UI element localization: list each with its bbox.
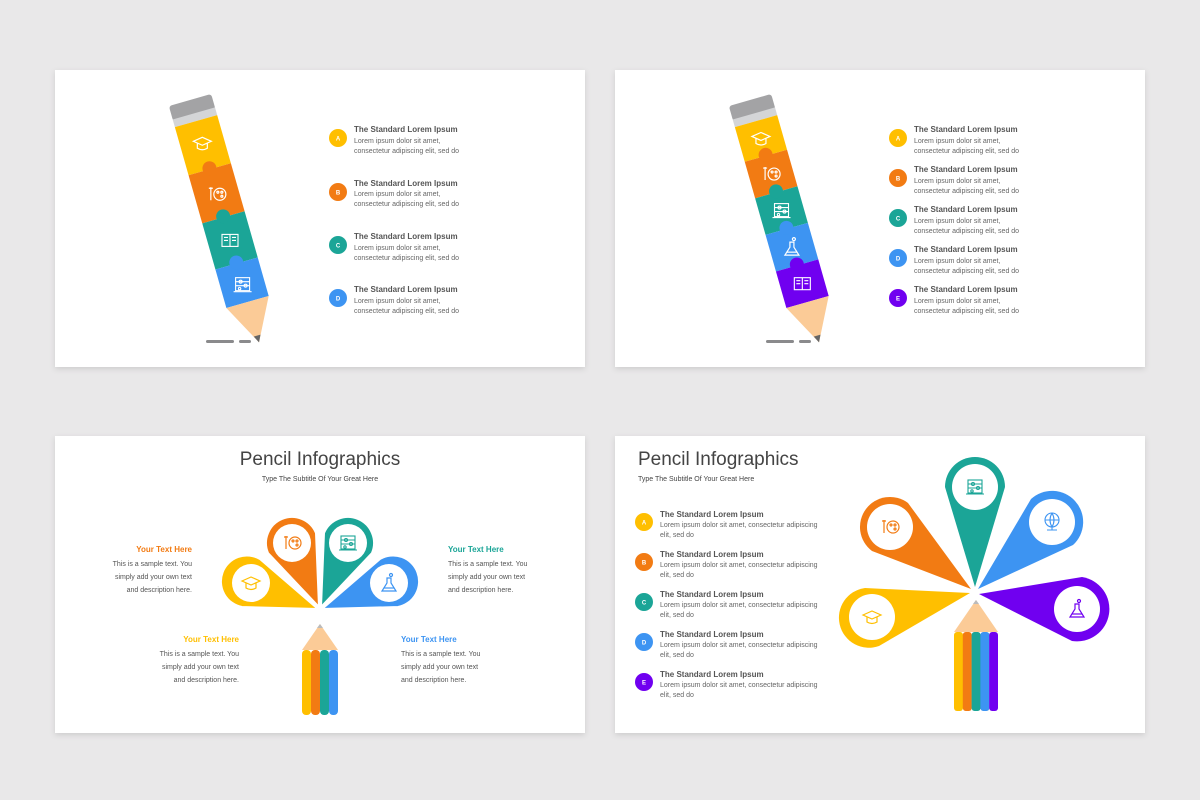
fan of 5 teardrops [839,457,1109,648]
text blocks: Your Text Here [448,545,504,554]
list A-D: Lorem ipsum dolor sit amet, [354,191,440,198]
list A-E: consectetur adipiscing elit, sed do [914,188,1019,195]
list A-D: B [336,190,341,196]
text blocks [113,545,527,684]
list A-E: The Standard Lorem Ipsum [660,590,764,599]
list A-D: The Standard Lorem Ipsum [354,125,458,134]
list A-E: Lorem ipsum dolor sit amet, [914,218,1000,225]
text blocks: and description here. [448,587,513,594]
list A-E: Lorem ipsum dolor sit amet, consectetur adipiscing [660,682,818,689]
subtitle: Type The Subtitle Of Your Great Here [262,476,378,483]
text blocks: Your Text Here [401,635,457,644]
text blocks: This is a sample text. You [401,651,480,658]
text blocks: and description here. [174,677,239,684]
list A-E: The Standard Lorem Ipsum [660,550,764,559]
list A-E: elit, sed do [660,652,694,659]
list A-E: Lorem ipsum dolor sit amet, consectetur adipiscing [660,602,818,609]
panel: bottom-right fan slide [615,436,1145,733]
list A-E [635,510,818,699]
list A-D: The Standard Lorem Ipsum [354,179,458,188]
subtitle: Type The Subtitle Of Your Great Here [638,476,754,483]
text blocks: simply add your own text [115,574,192,581]
text blocks: simply add your own text [162,664,239,671]
list A-E: B [896,176,901,182]
pencil with 5 puzzle segments [729,94,840,348]
pencil body [954,600,998,711]
list A-D: consectetur adipiscing elit, sed do [354,201,459,208]
text blocks: and description here. [401,677,466,684]
list A-E: The Standard Lorem Ipsum [914,245,1018,254]
list A-E: Lorem ipsum dolor sit amet, consectetur adipiscing [660,562,818,569]
list A-E: Lorem ipsum dolor sit amet, [914,298,1000,305]
list A-E: D [896,256,901,262]
panel: bottom-left fan slide [55,436,585,733]
list A-E: D [642,640,647,646]
list A-D: D [336,296,341,302]
list A-D [329,125,459,315]
list A-D: consectetur adipiscing elit, sed do [354,148,459,155]
text blocks: simply add your own text [401,664,478,671]
list A-E: B [642,560,647,566]
list A-E: Lorem ipsum dolor sit amet, consectetur adipiscing [660,642,818,649]
list A-E: consectetur adipiscing elit, sed do [914,228,1019,235]
text blocks: This is a sample text. You [113,561,192,568]
list A-D: The Standard Lorem Ipsum [354,285,458,294]
list A-E: The Standard Lorem Ipsum [660,510,764,519]
title: Pencil Infographics [240,449,400,470]
text blocks: simply add your own text [448,574,525,581]
list A-E: Lorem ipsum dolor sit amet, [914,178,1000,185]
list A-E: A [642,520,647,526]
text blocks: and description here. [127,587,192,594]
panel: top-left pencil slide [55,70,585,367]
list A-E: E [642,680,646,686]
list A-E: elit, sed do [660,572,694,579]
list A-D: consectetur adipiscing elit, sed do [354,255,459,262]
text blocks: Your Text Here [136,545,193,554]
list A-E: C [642,600,647,606]
list A-E: consectetur adipiscing elit, sed do [914,148,1019,155]
list A-E: consectetur adipiscing elit, sed do [914,308,1019,315]
pencil body [302,624,338,715]
text blocks: This is a sample text. You [448,561,527,568]
list A-D: Lorem ipsum dolor sit amet, [354,245,440,252]
list A-E: The Standard Lorem Ipsum [914,165,1018,174]
text blocks: Your Text Here [183,635,240,644]
text blocks: This is a sample text. You [160,651,239,658]
list A-D: A [336,136,341,142]
list A-E: elit, sed do [660,612,694,619]
panel: top-right pencil slide [615,70,1145,367]
list A-E: Lorem ipsum dolor sit amet, consectetur adipiscing [660,522,818,529]
list A-E: elit, sed do [660,532,694,539]
list A-E: E [896,296,900,302]
fan of 4 teardrops [221,517,419,609]
list A-E: The Standard Lorem Ipsum [660,670,764,679]
list A-E: The Standard Lorem Ipsum [914,285,1018,294]
list A-D: consectetur adipiscing elit, sed do [354,308,459,315]
list A-E: A [896,136,901,142]
list A-E: Lorem ipsum dolor sit amet, [914,138,1000,145]
list A-E: elit, sed do [660,692,694,699]
list A-D: The Standard Lorem Ipsum [354,232,458,241]
list A-E: consectetur adipiscing elit, sed do [914,268,1019,275]
list A-D: Lorem ipsum dolor sit amet, [354,138,440,145]
title: Pencil Infographics [638,449,799,470]
list A-E: Lorem ipsum dolor sit amet, [914,258,1000,265]
list A-E [889,125,1019,315]
list A-E: The Standard Lorem Ipsum [660,630,764,639]
pencil with 4 puzzle segments [169,94,280,348]
list A-E: The Standard Lorem Ipsum [914,125,1018,134]
list A-D: Lorem ipsum dolor sit amet, [354,298,440,305]
list A-D: C [336,244,341,250]
list A-E: The Standard Lorem Ipsum [914,205,1018,214]
list A-E: C [896,216,901,222]
